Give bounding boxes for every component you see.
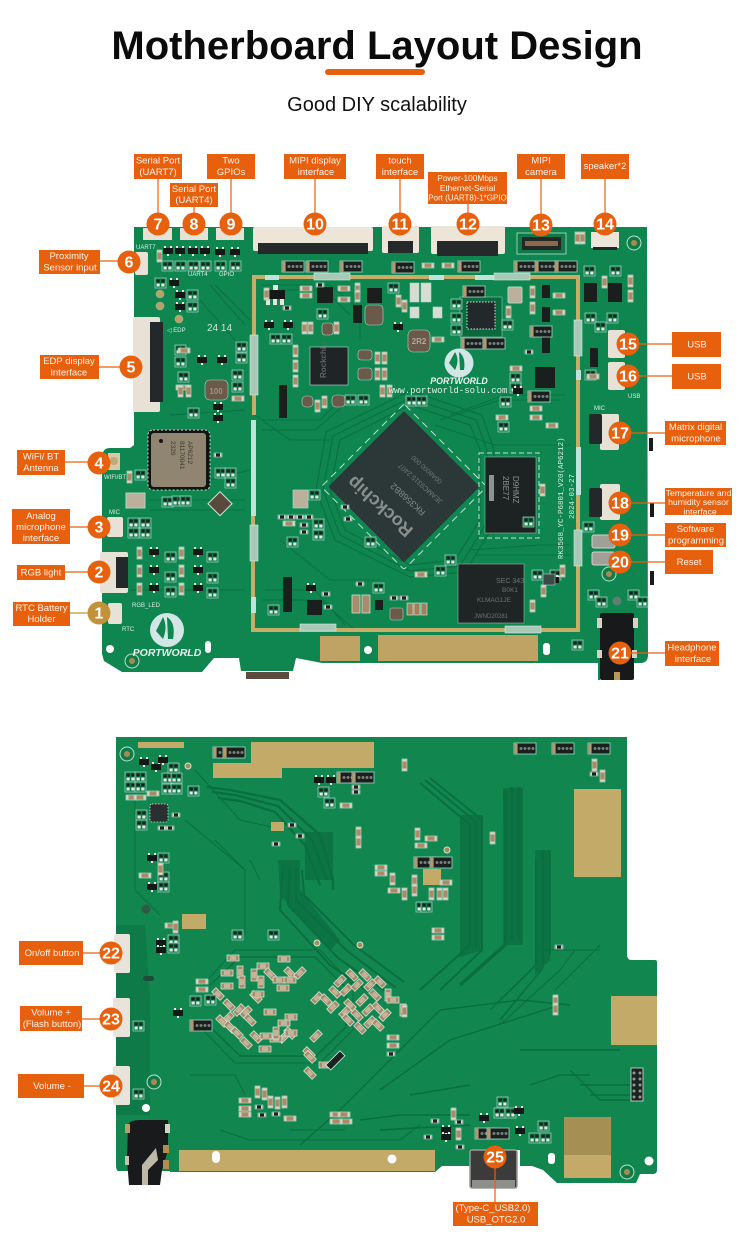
callout 8: Serial Port UART4: 8 [190, 216, 199, 234]
connectors 7 8 9 [143, 228, 244, 240]
silkscreen labels: UART4 [188, 272, 208, 278]
callout 1: RTC Battery Holder: RTC Battery [15, 603, 68, 614]
buttons 19 20 [592, 535, 615, 565]
callout 24: Volume - [18, 1074, 122, 1098]
callout 10: MIPI display interface: interface [298, 167, 334, 178]
inductor codes [209, 337, 427, 396]
callout 4: WiFi BT Antenna: 4 [95, 456, 104, 472]
callout 17: Matrix digital microphone: 17 [611, 426, 629, 442]
callout 9: Two GPIOs [207, 154, 255, 236]
silkscreen labels: WIFI/BT [104, 475, 126, 481]
logo center [430, 348, 488, 386]
callout 8: Serial Port UART4: (UART4) [175, 195, 213, 206]
callout 7: Serial Port UART7: Serial Port [136, 156, 181, 166]
callout 1: RTC Battery Holder: Holder [28, 614, 56, 625]
callout 12: Power Ethernet Serial Port [428, 172, 507, 236]
callout 23: Volume + Flash button: (Flash button) [23, 1019, 81, 1030]
silkscreen labels: 24 14 [207, 323, 232, 334]
audio jack bottom [125, 1120, 170, 1185]
callout 22: On/off button: On/off button [25, 948, 79, 959]
board outline top [102, 227, 648, 680]
connector 11: touch [382, 226, 419, 253]
callout 20: Reset: 20 [611, 554, 629, 572]
callout 23: Volume + Flash button: 23 [102, 1012, 120, 1028]
headphone jack 21 [597, 613, 638, 680]
callout 17: Matrix digital microphone: microphone [671, 434, 721, 444]
callout 12: Power Ethernet Serial Port: 12 [459, 216, 477, 234]
white regulators [410, 283, 442, 318]
inductors [205, 305, 430, 620]
connector 5: EDP [133, 317, 163, 412]
usb circuit cluster [424, 1097, 551, 1149]
WiFi module: 81170041 [178, 441, 185, 470]
callout 12: Power Ethernet Serial Port: Ethernet-Serial [440, 183, 495, 193]
scatter clusters of rotated parts [173, 955, 406, 1079]
passive components top board [126, 232, 648, 650]
mounting holes [125, 236, 641, 668]
callout 10: MIPI display interface: 10 [306, 216, 324, 234]
connectors 15 16: USB [608, 330, 625, 390]
RGB connector 2 [100, 552, 128, 593]
board url: www.portworld-solu.com [389, 386, 507, 396]
callout 13: MIPI camera [517, 154, 565, 236]
callout 2: RGB light [17, 560, 110, 584]
board version text [558, 437, 577, 559]
gold test points [156, 290, 183, 323]
gpio pads bottom right [631, 1068, 643, 1101]
callout 15: USB: 15 [619, 336, 637, 354]
callout 9: Two GPIOs: 9 [227, 216, 236, 234]
callout 8: Serial Port UART4: Serial Port [172, 184, 217, 195]
callout 6: Proximity Sensor input [39, 250, 140, 274]
CPU chip Rockchip: Rockchip [343, 472, 417, 541]
callout 22: On/off button: 22 [102, 946, 120, 962]
callout 18: Temperature and humidity sensor interface: 18 [611, 496, 629, 512]
callout 9: Two GPIOs: Two [222, 156, 240, 166]
callout 21: Headphone interface: Headphone [667, 642, 717, 654]
logo lower left [133, 613, 202, 659]
callout 16: USB [616, 364, 721, 389]
frame light segments [251, 275, 581, 613]
callout 25: Type-C USB OTG: USB_OTG2.0 [467, 1214, 525, 1226]
callout 15: USB [616, 332, 721, 357]
side buttons 22 23 24 [113, 934, 130, 1105]
title: Motherboard Layout Design [111, 24, 643, 68]
callout 16: USB: 16 [619, 368, 637, 386]
subtitle: Good DIY scalability [287, 94, 467, 116]
callout 6: Proximity Sensor input: Sensor input [43, 262, 97, 274]
callout 20: Reset: Reset [677, 557, 702, 568]
eMMC chip: B0K1 [502, 587, 518, 594]
darker gold pad [564, 1117, 611, 1155]
callout 23: Volume + Flash button [20, 1006, 122, 1031]
connector 17: mic [589, 414, 619, 450]
callout 4: WiFi BT Antenna: Antenna [23, 463, 59, 474]
eMMC chip: SEC 343 [496, 578, 524, 585]
callout 19: Software programming: programming [668, 536, 724, 546]
callout 4: WiFi BT Antenna [17, 450, 110, 475]
callout 17: Matrix digital microphone [608, 421, 726, 445]
callout 20: Reset [608, 550, 713, 574]
callout 14: speaker*2: 14 [596, 216, 614, 234]
callout 19: Software programming: Software [677, 524, 714, 535]
callout 24: Volume -: Volume - [33, 1081, 71, 1092]
callout 5: EDP display interface [40, 355, 142, 379]
callout 7: Serial Port UART7 [134, 154, 182, 236]
through holes bottom [142, 1104, 654, 1166]
callout 11: touch interface [376, 154, 424, 236]
callout 21: Headphone interface: 21 [611, 646, 629, 662]
callout 10: MIPI display interface: MIPI display [289, 156, 341, 166]
callout 24: Volume -: 24 [102, 1078, 120, 1096]
crystal [508, 287, 522, 303]
board version text: RK3568_YC-P6801_V20(AP6212) [558, 437, 566, 559]
silkscreen labels [104, 245, 640, 633]
callout 4: WiFi BT Antenna: WiFi/ BT [23, 452, 59, 462]
callout 11: touch interface: touch [388, 156, 412, 166]
gold antenna patches [320, 635, 538, 661]
callout 3: Analog microphone interface: microphone [16, 522, 66, 533]
callout 23: Volume + Flash button: Volume + [31, 1008, 71, 1018]
dark routing buses [278, 788, 550, 975]
RAM chip: 2BE77 [501, 476, 510, 501]
connector 18: sensor [589, 484, 620, 520]
callout 5: EDP display interface: 5 [127, 360, 136, 376]
button strip dark [649, 438, 654, 585]
QFN diamond [208, 492, 232, 516]
silkscreen labels: UART7 [136, 245, 156, 251]
callout 2: RGB light: RGB light [21, 568, 62, 578]
callout 11: touch interface: 11 [392, 216, 409, 234]
callout 7: Serial Port UART7: (UART7) [139, 167, 177, 178]
shadow near side buttons [116, 925, 150, 1115]
big SOT transistor [265, 285, 285, 305]
WiFi module: AP6212 [186, 441, 193, 465]
WiFi module: 2329 [169, 441, 176, 456]
callout 1: RTC Battery Holder: 1 [95, 606, 104, 622]
callout 19: Software programming: 19 [611, 528, 629, 544]
connector 13: MIPI camera [517, 233, 566, 254]
silkscreen labels: USB [628, 394, 640, 400]
callout 6: Proximity Sensor input: Proximity [49, 251, 89, 262]
callout 12: Power Ethernet Serial Port: Power-100Mbps [437, 173, 498, 183]
callout 13: MIPI camera: MIPI [531, 156, 551, 166]
eMMC chip: KLMAG1JE [477, 597, 512, 604]
title underline accent [325, 69, 425, 75]
callout 3: Analog microphone interface: 3 [95, 520, 104, 536]
usb tab connector [246, 672, 289, 679]
callout 13: MIPI camera: 13 [532, 218, 550, 234]
callout 25: Type-C USB OTG [453, 1146, 538, 1226]
callout 1: RTC Battery Holder [13, 602, 110, 626]
silkscreen labels: ◁ EDP [167, 328, 186, 334]
callout 17: Matrix digital microphone: Matrix digital [669, 422, 722, 433]
Type-C connector [470, 1150, 517, 1188]
callout 9: Two GPIOs: GPIOs [217, 167, 245, 178]
callout 18: Temperature and humidity sensor interface: humidity sensor [668, 497, 729, 507]
callout 3: Analog microphone interface [12, 509, 110, 544]
silkscreen labels: RTC [122, 627, 135, 633]
CPU chip Rockchip: 00A8000 000 [410, 453, 444, 485]
PMIC chip: Rockchip [319, 342, 328, 378]
callout 22: On/off button [19, 941, 122, 965]
eMMC chip: JWND20281 [474, 614, 509, 620]
callout 3: Analog microphone interface: Analog [26, 511, 56, 522]
callout 14: speaker*2: speaker*2 [584, 161, 626, 172]
inductor codes: 2R2 [412, 337, 427, 346]
callout 18: Temperature and humidity sensor interface: Temperature and [666, 488, 732, 498]
connector 14: speaker [591, 232, 619, 250]
callout 25: Type-C USB OTG: 25 [486, 1150, 504, 1166]
CPU chip Rockchip: RK3568B2 [388, 481, 428, 518]
callout 19: Software programming [608, 523, 726, 547]
connector 12: ethernet serial [431, 226, 505, 256]
callout 5: EDP display interface: interface [51, 368, 87, 378]
callout 8: Serial Port UART4 [170, 183, 218, 236]
CPU chip Rockchip: JEAMC9315 2407 [397, 461, 444, 505]
routing traces [135, 770, 630, 1145]
RAM chip [479, 453, 539, 538]
logo center: PORTWORLD [430, 376, 488, 386]
ethernet chip [460, 297, 502, 337]
board outline bottom [116, 737, 657, 1183]
callout 3: Analog microphone interface: interface [23, 533, 59, 544]
frame test strips [250, 273, 582, 633]
logo lower left: PORTWORLD [133, 647, 202, 659]
through holes [106, 641, 550, 655]
passive components bottom board [125, 743, 610, 1124]
callout 6: Proximity Sensor input: 6 [125, 254, 134, 272]
callout 13: MIPI camera: camera [525, 167, 558, 178]
callout 12: Power Ethernet Serial Port: Port (UART8)-1*GPIO [428, 194, 507, 202]
callout 21: Headphone interface [608, 641, 719, 666]
callout 15: USB: USB [687, 340, 707, 350]
RAM chip: D9HMZ [511, 476, 520, 504]
antenna connector 4 [108, 453, 120, 470]
callout 11: touch interface: interface [382, 167, 418, 178]
mounting rings bottom [120, 747, 634, 1179]
callout 18: Temperature and humidity sensor interface: interface [683, 506, 717, 516]
power ICs SOP [279, 283, 622, 615]
callout 18: Temperature and humidity sensor interface [608, 488, 732, 516]
callout 10: MIPI display interface [284, 154, 346, 236]
callout 2: RGB light: 2 [95, 564, 104, 582]
WiFi module [148, 430, 210, 490]
diagonal test pad [326, 1051, 345, 1070]
eMMC chip [458, 564, 524, 623]
PMIC chip [310, 342, 348, 385]
callout 7: Serial Port UART7: 7 [154, 216, 163, 234]
silkscreen labels: RGB_LED [132, 603, 161, 609]
connector 10: MIPI display [253, 227, 373, 254]
gold frame [253, 277, 578, 630]
gold pads [138, 742, 657, 1178]
panel: motherboard front side [100, 226, 654, 680]
mic connector 3 [107, 517, 123, 537]
inductor codes: 100 [209, 387, 223, 396]
board version text: 2024-03-27 [569, 474, 577, 519]
panel: motherboard back side [113, 737, 657, 1188]
RTC connector 1 [108, 603, 122, 624]
callout 25: Type-C USB OTG: (Type-C_USB2.0) [456, 1203, 530, 1214]
callout 14: speaker*2 [581, 154, 629, 236]
inner circuit traces [130, 285, 570, 630]
silkscreen labels: MIC [594, 406, 606, 412]
connector 6: proximity [135, 252, 148, 275]
silkscreen labels: MIC [109, 510, 121, 516]
CPU chip Rockchip [321, 404, 487, 569]
callout 21: Headphone interface: interface [675, 654, 711, 665]
callout 5: EDP display interface: EDP display [43, 356, 95, 367]
silkscreen labels: GPIO [219, 272, 234, 278]
callout 16: USB: USB [687, 372, 707, 382]
